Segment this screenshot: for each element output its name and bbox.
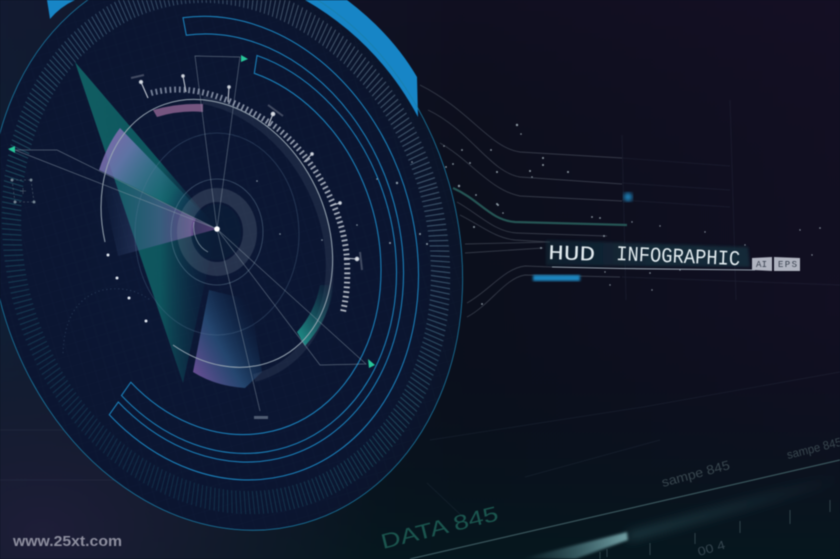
- badge: EPS: [774, 257, 800, 271]
- teal rim segment: [297, 285, 334, 346]
- blue top band: [47, 0, 418, 117]
- badge: AI: [752, 257, 772, 271]
- white main ring arc: [101, 99, 333, 367]
- purple wedge upper: [99, 128, 217, 228]
- dotted arc lower left: [63, 289, 150, 353]
- blue arc band inner: [122, 56, 397, 453]
- label: 00 4: 00 4: [696, 538, 727, 559]
- teal wedge: [75, 62, 217, 383]
- green arrows: [8, 55, 375, 368]
- pointer lines: [15, 56, 366, 411]
- outer thin ring: [0, 0, 528, 559]
- blue bar: [533, 275, 580, 281]
- center dot: [214, 226, 220, 232]
- badge: EPS: EPS: [778, 260, 797, 270]
- tick markers: [131, 75, 362, 270]
- hatched tick ring: [0, 0, 500, 554]
- teal connector line: [453, 188, 627, 225]
- title: INFOGRAPHIC: [616, 244, 741, 272]
- faint inner ring: [135, 133, 299, 335]
- pink rim segment: [153, 104, 203, 117]
- radar disc: [0, 0, 528, 559]
- bottom ruler ticks: [600, 500, 830, 559]
- focus square icon: [11, 179, 35, 203]
- label: DATA 845: DATA 845: [379, 503, 501, 554]
- center target rings: [171, 179, 263, 285]
- particles: [256, 124, 821, 305]
- title: [548, 243, 741, 272]
- bottom dim glow: [628, 472, 840, 541]
- faint perspective grid: [0, 100, 840, 517]
- title underline: [552, 267, 755, 270]
- title: HUD: [548, 243, 596, 268]
- translucent gray band around ring: [203, 100, 330, 378]
- blue glow dot: [624, 192, 632, 202]
- connector lines: [420, 85, 622, 317]
- watermark: www.25xt.com: [12, 533, 122, 550]
- white dots: [106, 254, 148, 322]
- purple wedge left: [100, 172, 217, 256]
- title backing band: [546, 240, 750, 267]
- blue arc band outer: [109, 16, 418, 480]
- badge: AI: AI: [756, 260, 767, 270]
- bottom diagonal line: [410, 460, 840, 559]
- tick scale arc: [151, 90, 347, 312]
- purple wedge bottom: [193, 290, 262, 388]
- label: sampe 845: sampe 845: [660, 457, 731, 490]
- small label below radar: [254, 416, 268, 419]
- bottom glow bar: [520, 532, 628, 559]
